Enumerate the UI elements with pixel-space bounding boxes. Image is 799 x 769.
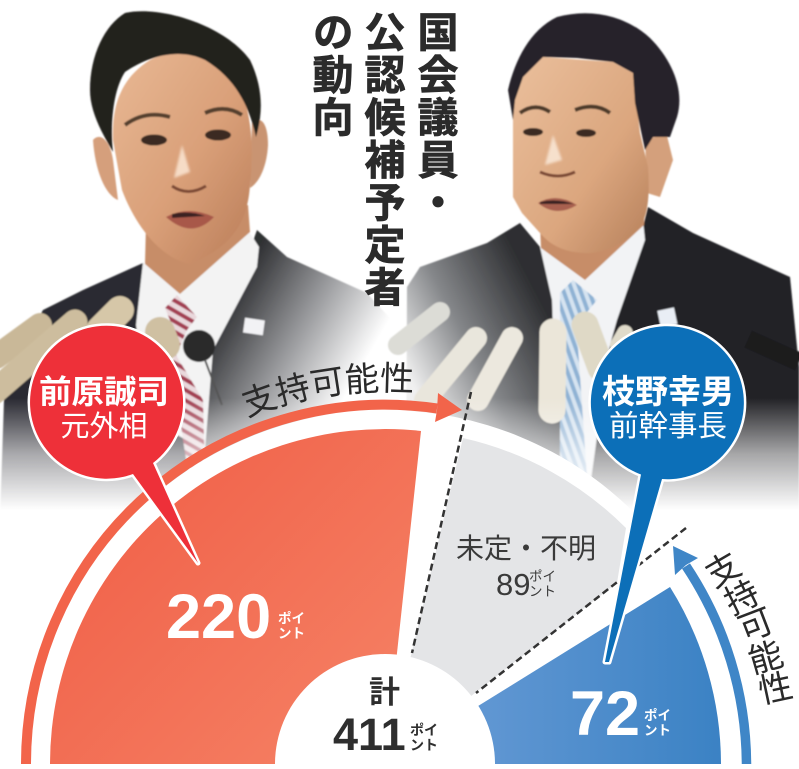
- white disc behind chart: [31, 410, 739, 764]
- callout: Edano: 枝野幸男: [602, 365, 734, 413]
- callout: Maehara: [30, 326, 198, 563]
- segment: Maehara 220: [50, 429, 421, 764]
- lapel pin: [243, 318, 265, 335]
- photo: Maehara: [0, 11, 405, 520]
- value: 220 points: ント: [278, 622, 305, 642]
- arrow: red support arc: [26, 393, 462, 764]
- label: blue support: 持: [719, 574, 766, 623]
- photo fade to white: [0, 398, 799, 510]
- label: blue support: 可: [733, 602, 779, 650]
- title column 1: 国会議員・: [408, 11, 468, 224]
- shirt: [136, 230, 259, 450]
- left ear: [93, 137, 118, 200]
- callout: Maehara: 前原誠司: [39, 366, 169, 413]
- value: 72 points: [570, 679, 671, 749]
- title column 3: の動向: [303, 11, 363, 138]
- facial features: [520, 107, 610, 211]
- label: blue support: 支: [699, 546, 748, 595]
- callout: Maehara: 元外相: [60, 403, 148, 445]
- dashed divider left: [412, 392, 471, 653]
- value: 72 points: ポイ: [644, 704, 671, 724]
- value: undecided 89 points: 未定・不明: [456, 527, 596, 567]
- photo: Edano: [398, 13, 799, 520]
- hair: [508, 13, 679, 150]
- label: blue support: 性: [755, 667, 796, 711]
- label: blue support: 能: [744, 635, 788, 681]
- centre hole: [275, 654, 495, 764]
- value: total 411 points: [333, 667, 438, 760]
- segment: Edano 72: [470, 587, 721, 764]
- value: undecided 89 points: ント: [529, 580, 556, 600]
- suit: [406, 223, 590, 520]
- ear: [645, 136, 673, 197]
- value: undecided 89 points: [456, 527, 596, 602]
- value: total 411 points: 411: [333, 709, 406, 760]
- suit right: [200, 230, 405, 520]
- tie: [165, 295, 205, 470]
- face: [513, 57, 649, 253]
- dashed divider right: [476, 528, 686, 693]
- neck: [145, 205, 250, 294]
- value: total 411 points: ポイ: [410, 720, 438, 740]
- value: total 411 points: 計: [369, 667, 400, 712]
- lapel pin: [657, 307, 677, 327]
- value: undecided 89 points: 89: [496, 567, 530, 602]
- title: 国会議員・公認候補予定者の動向: [303, 11, 468, 308]
- right ear: [250, 120, 268, 188]
- value: 220 points: ポイ: [278, 607, 305, 627]
- suit left: [0, 263, 200, 520]
- value: 72 points: 72: [570, 679, 640, 749]
- segment: undecided 89: [385, 438, 626, 764]
- face: [113, 53, 252, 264]
- mic cluster: [0, 310, 222, 405]
- label: red support: 支持可能性: [242, 362, 412, 418]
- hair: [90, 11, 261, 152]
- value: total 411 points: ント: [410, 735, 438, 755]
- photo white lower area: [0, 510, 799, 769]
- callout: Edano: [591, 326, 744, 662]
- shirt: [540, 220, 645, 520]
- value: undecided 89 points: ポイ: [529, 565, 556, 585]
- pie chart: [50, 392, 721, 764]
- callout: Edano: 前幹事長: [609, 403, 727, 445]
- mic cluster: [398, 312, 799, 410]
- value: 220 points: 220: [166, 582, 271, 652]
- value: 72 points: ント: [644, 719, 671, 739]
- suit right: [580, 207, 799, 520]
- tie: [560, 280, 597, 520]
- label: blue support: [699, 546, 796, 711]
- neck: [540, 195, 645, 280]
- title column 2: 公認候補予定者: [355, 11, 415, 308]
- facial features: [125, 109, 242, 228]
- arrow: blue support arc: [673, 546, 746, 764]
